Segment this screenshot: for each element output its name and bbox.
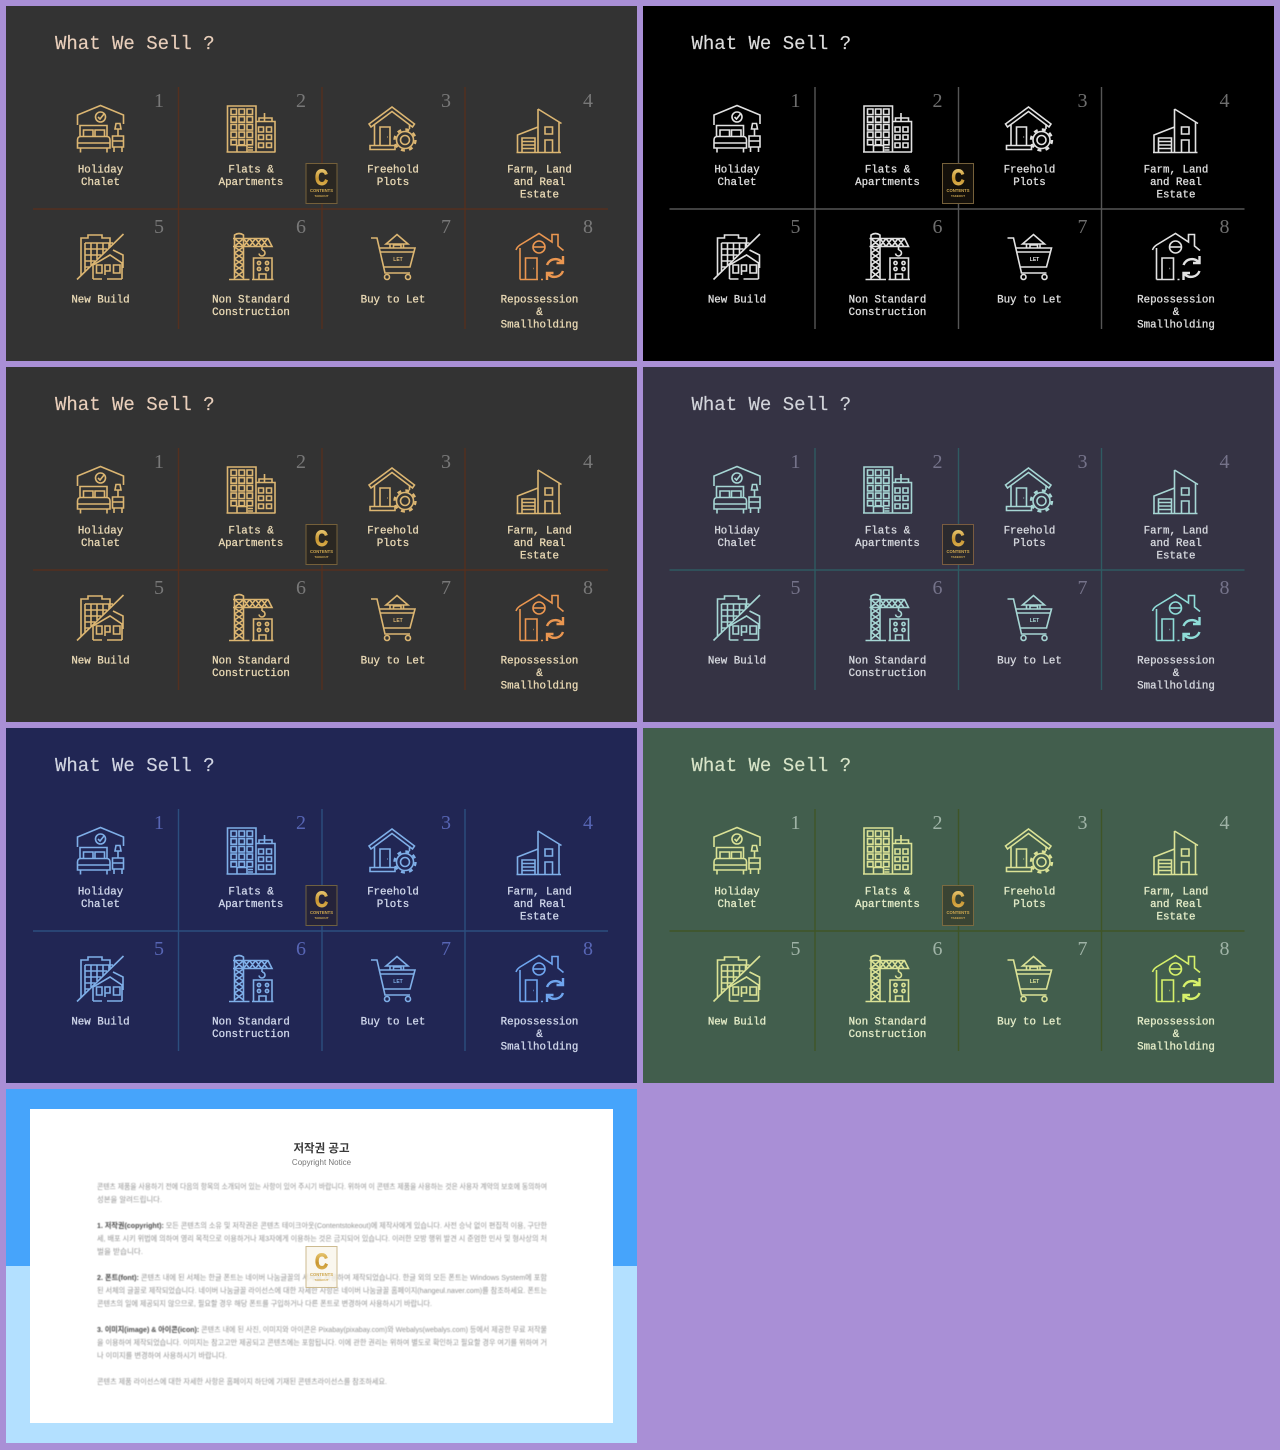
item labels: Repossession xyxy=(1137,294,1215,306)
notice body text: 나 이미지를 변경하여 사용하시기 바랍니다. xyxy=(97,1350,227,1360)
item labels: Buy to Let xyxy=(361,1016,425,1028)
notice heading: 저작권 공고 xyxy=(293,1141,350,1155)
watermark logo: C xyxy=(315,1249,328,1274)
watermark logo xyxy=(306,1246,337,1288)
item numbers: 2 xyxy=(296,90,306,112)
item labels: Estate xyxy=(520,189,559,201)
item labels: Apartments xyxy=(219,899,283,911)
item labels: and Real xyxy=(514,899,565,911)
item labels: Apartments xyxy=(219,177,283,189)
item labels: Buy to Let xyxy=(361,656,425,668)
item labels: New Build xyxy=(708,1016,766,1028)
panel: copyright notice xyxy=(6,1089,637,1443)
item labels: Flats & xyxy=(228,164,274,176)
item numbers: 8 xyxy=(1220,216,1230,238)
item labels: Repossession xyxy=(501,1016,578,1028)
item labels: Flats & xyxy=(865,164,910,176)
item numbers: 2 xyxy=(932,90,942,112)
logo: C xyxy=(952,165,965,190)
item labels: Non Standard xyxy=(849,656,926,668)
logo: TAKEOUT xyxy=(314,555,329,559)
item labels xyxy=(71,886,578,1053)
logo xyxy=(306,164,337,204)
watermark logo: CONTENTS xyxy=(310,1272,333,1277)
item labels: New Build xyxy=(71,656,130,668)
item labels: New Build xyxy=(708,656,766,668)
item labels: Freehold xyxy=(367,886,419,898)
item numbers: 8 xyxy=(1220,938,1230,960)
item labels: Flats & xyxy=(228,886,274,898)
logo xyxy=(942,524,974,564)
logo: C xyxy=(315,526,328,551)
item numbers: 5 xyxy=(790,577,800,599)
item labels: Holiday xyxy=(714,164,760,176)
item labels: Plots xyxy=(1013,899,1046,911)
item labels: & xyxy=(536,307,543,319)
notice body text: 3. 이미지(image) & 아이콘(icon): 콘텐츠 내에 된 사진, 이미지와 아이콘은 Pixabay(pixabay.com)와 Webalys(webalys.com) 등에서 제공한 무료 저작물 xyxy=(97,1324,547,1334)
item numbers: 6 xyxy=(932,216,942,238)
item labels: Smallholding xyxy=(1137,680,1215,692)
item labels: Buy to Let xyxy=(997,656,1062,668)
logo: CONTENTS xyxy=(310,549,333,554)
item labels: Estate xyxy=(1157,911,1195,923)
item numbers: 4 xyxy=(583,812,593,834)
item labels: Smallholding xyxy=(1137,319,1215,331)
notice body text: 콘텐츠의 일에 제공되지 않으므로, 필요할 경우 해당 폰트를 구입하거나 다른 폰트로 변경하여 사용하시기 바랍니다. xyxy=(97,1298,432,1308)
item numbers: 8 xyxy=(583,938,593,960)
logo: C xyxy=(315,887,328,912)
item labels: Plots xyxy=(1013,538,1046,550)
item labels: Freehold xyxy=(367,164,419,176)
item labels: Construction xyxy=(849,668,926,680)
item labels: Buy to Let xyxy=(361,294,425,306)
item numbers: 6 xyxy=(296,938,306,960)
logo xyxy=(306,524,337,564)
item labels: Apartments xyxy=(855,177,920,189)
panel: slide 2 black white xyxy=(643,6,1274,361)
icons xyxy=(77,828,564,1002)
item labels: Repossession xyxy=(1137,1016,1215,1028)
panel: slide 6 forest green xyxy=(643,728,1274,1083)
icons: LET xyxy=(1030,618,1039,624)
item numbers: 7 xyxy=(441,938,451,960)
item labels: Holiday xyxy=(78,164,123,176)
item numbers: 6 xyxy=(296,216,306,238)
item labels: and Real xyxy=(514,538,565,550)
item labels xyxy=(708,886,1215,1053)
logo xyxy=(306,886,337,926)
item labels: Chalet xyxy=(81,177,120,189)
item labels: Farm, Land xyxy=(507,886,572,898)
logo: TAKEOUT xyxy=(951,555,965,559)
icons xyxy=(714,106,1200,280)
item labels: Apartments xyxy=(219,538,283,550)
logo: TAKEOUT xyxy=(951,916,965,920)
item labels: Smallholding xyxy=(501,1041,578,1053)
item labels: Freehold xyxy=(1004,886,1055,898)
item labels: Repossession xyxy=(1137,656,1215,668)
logo: CONTENTS xyxy=(310,910,333,915)
item numbers: 5 xyxy=(790,938,800,960)
item numbers: 4 xyxy=(1220,451,1230,473)
logo xyxy=(942,164,974,204)
item labels xyxy=(708,164,1215,331)
item numbers: 7 xyxy=(441,216,451,238)
item numbers xyxy=(154,451,593,599)
item numbers: 5 xyxy=(154,577,164,599)
item numbers: 5 xyxy=(790,216,800,238)
item labels: Estate xyxy=(520,550,559,562)
item labels: Farm, Land xyxy=(1144,164,1208,176)
logo: C xyxy=(315,165,328,190)
logo: CONTENTS xyxy=(946,188,970,193)
item labels: Farm, Land xyxy=(1144,886,1208,898)
notice body text: 콘텐츠 제품 라이선스에 대한 자세한 사항은 홈페이지 하단에 기재된 콘텐츠라이선스를 참조하세요. xyxy=(97,1376,387,1386)
item numbers: 4 xyxy=(583,451,593,473)
item numbers: 2 xyxy=(932,451,942,473)
item labels: Chalet xyxy=(718,899,756,911)
item labels: Smallholding xyxy=(501,319,578,331)
item numbers xyxy=(790,812,1230,960)
item numbers: 8 xyxy=(583,216,593,238)
item labels: & xyxy=(536,668,543,680)
item numbers xyxy=(790,451,1230,599)
item numbers: 3 xyxy=(1078,90,1088,112)
item labels xyxy=(708,526,1215,692)
item labels: Non Standard xyxy=(849,1016,926,1028)
item labels: Construction xyxy=(212,307,290,319)
icons xyxy=(714,466,1200,641)
item labels: Plots xyxy=(377,899,409,911)
item numbers: 1 xyxy=(790,90,800,112)
logo: TAKEOUT xyxy=(314,194,329,198)
icons: LET xyxy=(1030,257,1039,263)
item numbers: 8 xyxy=(1220,577,1230,599)
logo: TAKEOUT xyxy=(951,194,965,198)
item numbers: 2 xyxy=(296,451,306,473)
panel: slide 3 charcoal gold xyxy=(6,367,637,722)
item labels: Holiday xyxy=(714,526,760,538)
item labels: Apartments xyxy=(855,899,920,911)
item labels: and Real xyxy=(1150,177,1202,189)
item numbers: 1 xyxy=(790,451,800,473)
item numbers xyxy=(154,90,593,238)
panel: slide 1 charcoal gold xyxy=(6,6,637,361)
logo: C xyxy=(952,887,965,912)
item labels: & xyxy=(1173,668,1180,680)
notice body text: 성본을 알려드립니다. xyxy=(97,1194,162,1204)
item numbers: 1 xyxy=(154,812,164,834)
item labels: Flats & xyxy=(865,886,910,898)
logo: C xyxy=(952,526,965,551)
title: What We Sell ? xyxy=(55,394,215,416)
item labels: and Real xyxy=(1150,899,1202,911)
item labels: Repossession xyxy=(501,294,578,306)
item numbers: 6 xyxy=(932,577,942,599)
item labels: and Real xyxy=(1150,538,1202,550)
icons: LET xyxy=(1030,979,1039,985)
item labels: Farm, Land xyxy=(1144,526,1208,538)
panel: slide 5 navy blue xyxy=(6,728,637,1083)
item labels: & xyxy=(1173,1029,1180,1041)
item labels: Smallholding xyxy=(501,680,578,692)
item numbers: 1 xyxy=(154,451,164,473)
notice body text xyxy=(97,1181,547,1386)
item labels: Plots xyxy=(1013,177,1046,189)
item numbers: 1 xyxy=(154,90,164,112)
item labels: Freehold xyxy=(1004,526,1055,538)
item numbers: 4 xyxy=(583,90,593,112)
item labels: Estate xyxy=(1157,550,1195,562)
item numbers xyxy=(154,812,593,960)
item labels: Chalet xyxy=(81,899,120,911)
notice body text: 된 서체의 글꼴로 제작되었습니다. 네이버 나눔글꼴 라이선스에 대한 자세한 사항은 네이버 나눔글꼴 홈페이지(hangeul.naver.com)를 참조하세요. 폰트는 xyxy=(97,1285,547,1295)
item labels: New Build xyxy=(71,294,130,306)
item labels: Chalet xyxy=(718,538,756,550)
item labels: and Real xyxy=(514,177,565,189)
item labels: Holiday xyxy=(78,886,123,898)
icons: LET xyxy=(393,618,403,624)
item labels: Estate xyxy=(1157,189,1195,201)
notice body text: 2. 폰트(font): 콘텐츠 내에 된 서체는 한글 폰트는 네이버 나눔글꼴의 서체를 사용하여 제작되었습니다. 한글 외의 모든 폰트는 Windows System에 포함 xyxy=(97,1272,547,1282)
item numbers: 7 xyxy=(441,577,451,599)
item numbers: 5 xyxy=(154,216,164,238)
item numbers: 2 xyxy=(932,812,942,834)
item numbers: 4 xyxy=(1220,90,1230,112)
item labels: Farm, Land xyxy=(507,526,572,538)
notice body text: 을 이용하여 제작되었습니다. 이미지는 참고고만 제공되고 콘텐츠에는 포함됩니다. 이에 관한 권리는 위하여 별도로 확인하고 필요할 경우 여기를 위하여 거 xyxy=(97,1337,547,1347)
item labels xyxy=(71,164,578,331)
item labels: Flats & xyxy=(228,526,274,538)
item labels: Construction xyxy=(212,668,290,680)
notice body text: 콘텐츠 제품을 사용하기 전에 다음의 항목의 소개되어 있는 사항이 있어 주시기 바랍니다. 위하여 이 콘텐츠 제품을 사용하는 것은 사용자 계약의 보호에 동의하여 xyxy=(97,1181,547,1191)
item numbers: 3 xyxy=(441,812,451,834)
item labels: Holiday xyxy=(78,526,123,538)
notice body text: 세, 배포 시키 위법에 의하여 영리 목적으로 이용하거나 제3자에게 이용하는 것은 금지되어 있습니다. 이러한 모방 행위 발견 시 준엄한 민사 및 형사상의 처 xyxy=(97,1233,547,1243)
item labels: New Build xyxy=(708,294,766,306)
item labels: Buy to Let xyxy=(997,1016,1062,1028)
icons: LET xyxy=(393,979,403,985)
notice body text: 1. 저작권(copyright): 모든 콘텐츠의 소유 및 저작권은 콘텐츠 테이크아웃(Contentstokeout)에 제작사에게 있습니다. 사전 승낙 없이 편집적 이용, 구단한 xyxy=(97,1220,547,1230)
item numbers: 2 xyxy=(296,812,306,834)
item numbers: 3 xyxy=(1078,812,1088,834)
item numbers: 4 xyxy=(1220,812,1230,834)
icons: LET xyxy=(393,257,403,263)
item numbers: 6 xyxy=(296,577,306,599)
item labels: Construction xyxy=(849,1029,926,1041)
item labels: Chalet xyxy=(718,177,756,189)
item labels: Farm, Land xyxy=(507,164,572,176)
item numbers: 3 xyxy=(441,90,451,112)
item labels: Construction xyxy=(212,1029,290,1041)
item labels: New Build xyxy=(71,1016,130,1028)
item numbers: 8 xyxy=(583,577,593,599)
title: What We Sell ? xyxy=(692,33,851,55)
item labels: & xyxy=(536,1029,543,1041)
logo: TAKEOUT xyxy=(314,916,329,920)
notice body text: 벌을 받습니다. xyxy=(97,1246,143,1256)
item labels: Freehold xyxy=(367,526,419,538)
logo xyxy=(942,886,974,926)
title: What We Sell ? xyxy=(55,33,215,55)
item labels: Plots xyxy=(377,538,409,550)
icons xyxy=(77,466,564,641)
item numbers: 6 xyxy=(932,938,942,960)
item numbers: 7 xyxy=(1078,216,1088,238)
item labels: Buy to Let xyxy=(997,294,1062,306)
item labels: Non Standard xyxy=(212,1016,290,1028)
item labels: Plots xyxy=(377,177,409,189)
item labels: Holiday xyxy=(714,886,760,898)
item labels: Construction xyxy=(849,307,926,319)
title: What We Sell ? xyxy=(55,755,215,777)
logo: CONTENTS xyxy=(310,188,333,193)
watermark logo: TAKEOUT xyxy=(314,1278,329,1282)
icons xyxy=(77,106,564,280)
title: What We Sell ? xyxy=(692,394,851,416)
item labels: & xyxy=(1173,307,1180,319)
panel: slide 4 slate teal xyxy=(643,367,1274,722)
item numbers: 7 xyxy=(1078,577,1088,599)
logo: CONTENTS xyxy=(946,549,970,554)
notice subheading: Copyright Notice xyxy=(292,1158,352,1167)
item labels xyxy=(71,526,578,692)
item labels: Repossession xyxy=(501,656,578,668)
item labels: Non Standard xyxy=(212,294,290,306)
title: What We Sell ? xyxy=(692,755,851,777)
item labels: Flats & xyxy=(865,526,910,538)
item labels: Non Standard xyxy=(212,656,290,668)
item numbers: 7 xyxy=(1078,938,1088,960)
item numbers: 3 xyxy=(441,451,451,473)
item numbers: 3 xyxy=(1078,451,1088,473)
item numbers: 5 xyxy=(154,938,164,960)
item labels: Non Standard xyxy=(849,294,926,306)
item labels: Chalet xyxy=(81,538,120,550)
logo: CONTENTS xyxy=(946,910,970,915)
icons xyxy=(714,828,1200,1002)
item numbers xyxy=(790,90,1230,238)
item labels: Apartments xyxy=(855,538,920,550)
item numbers: 1 xyxy=(790,812,800,834)
item labels: Estate xyxy=(520,911,559,923)
item labels: Smallholding xyxy=(1137,1041,1215,1053)
item labels: Freehold xyxy=(1004,164,1055,176)
